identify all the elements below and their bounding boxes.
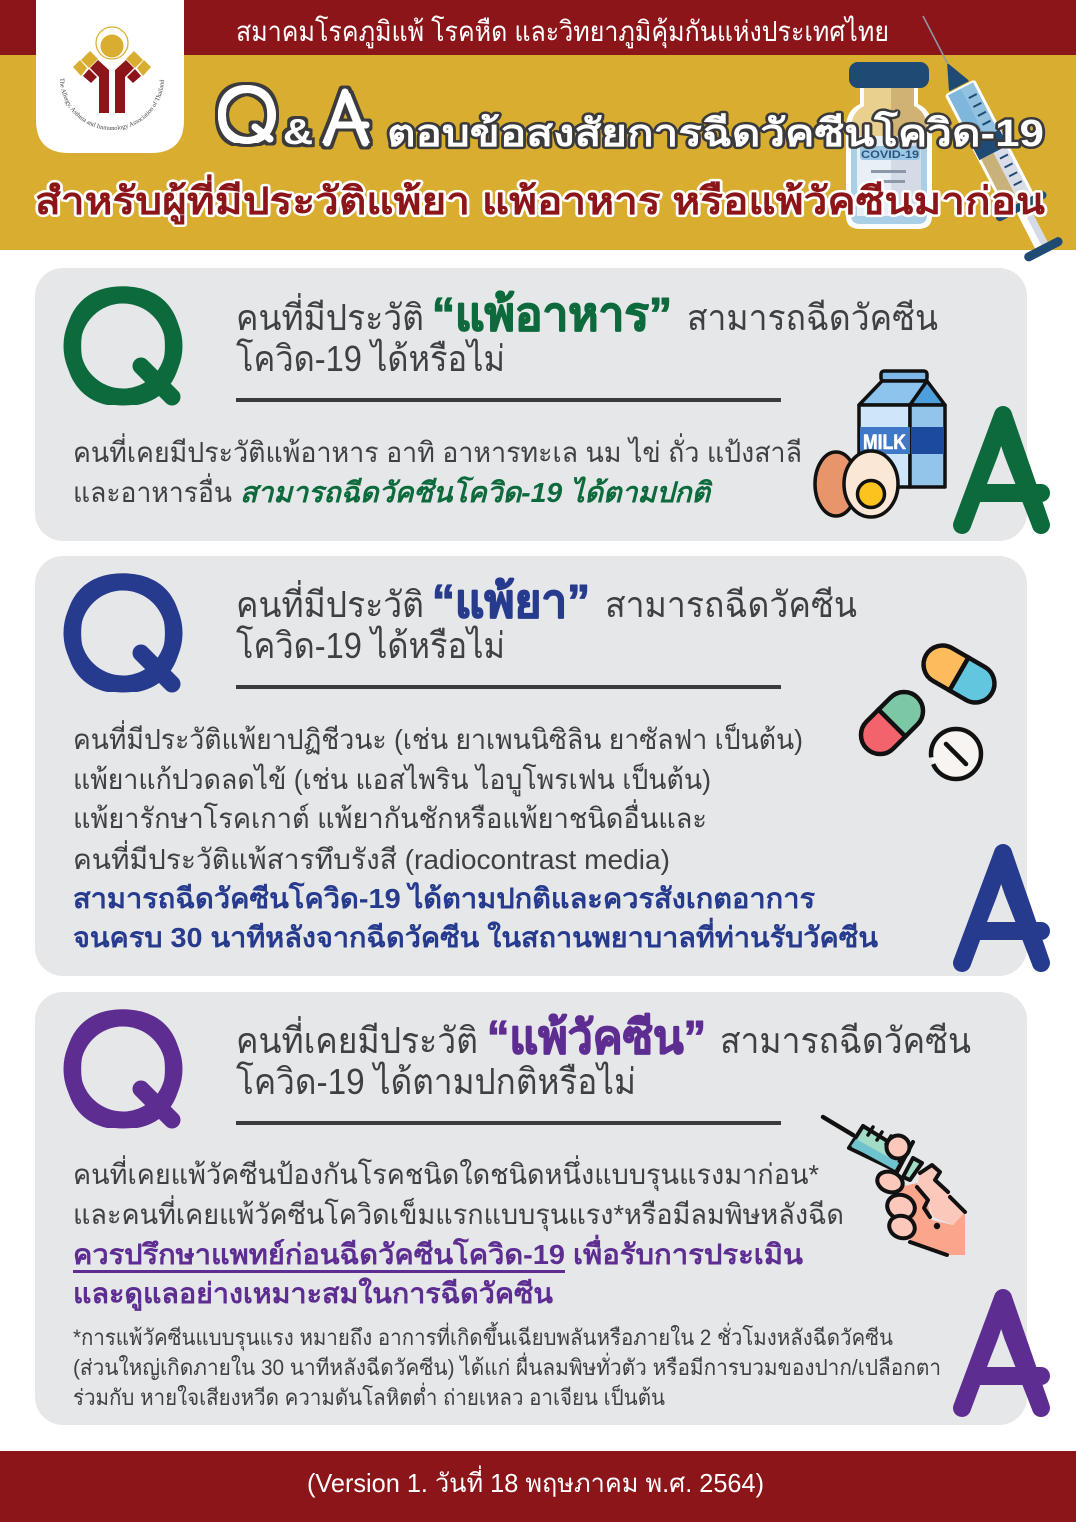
question: คนที่เคยมีประวัติ xyxy=(236,1016,478,1061)
answer: และคนที่เคยแพ้วัคซีนโควิดเข็มแรกแบบรุนแรง*หรือมีลมพิษหลังฉีด xyxy=(73,1195,844,1232)
panel: food allergy xyxy=(35,252,1045,553)
vial illustration: COVID-19 xyxy=(861,149,919,161)
question xyxy=(236,575,857,666)
answer: จนครบ 30 นาทีหลังจากฉีดวัคซีน ในสถานพยาบาลที่ท่านรับวัคซีน xyxy=(73,917,878,953)
title Thai: ตอบข้อสงสัยการฉีดวัคซีนโควิด-19 xyxy=(387,110,1044,155)
answer: ควรปรึกษาแพทย์ก่อนฉีดวัคซีนโควิด-19 xyxy=(73,1237,565,1270)
answer xyxy=(73,720,878,953)
answer: แพ้ยาแก้ปวดลดไข้ (เช่น แอสไพริน ไอบูโพรเฟน เป็นต้น) xyxy=(73,762,711,797)
footnote: ร่วมกับ หายใจเสียงหวีด ความดันโลหิตต่ำ ถ่ายเหลว อาเจียน เป็นต้น xyxy=(73,1382,665,1410)
letter Q green: Q xyxy=(57,252,189,442)
question: “แพ้วัคซีน” xyxy=(487,1011,706,1063)
answer: สามารถฉีดวัคซีนโควิด-19 ได้ตามปกติ xyxy=(240,475,713,508)
logo card: The Allergy, Asthma and Immunology Association of Thailand xyxy=(60,78,164,130)
letter Q green xyxy=(64,286,182,406)
panel: drug allergy xyxy=(35,539,1045,991)
answer: คนที่เคยมีประวัติแพ้อาหาร อาทิ อาหารทะเล นม ไข่ ถั่ว แป้งสาลี xyxy=(73,433,802,468)
answer: คนที่มีประวัติแพ้ยาปฏิชีวนะ (เช่น ยาเพนนิซิลิน ยาซัลฟา เป็นต้น) xyxy=(73,720,803,755)
title Q&A: Q xyxy=(214,68,279,162)
question: สามารถฉีดวัคซีน xyxy=(687,297,938,338)
letter A purple: A xyxy=(958,1293,1045,1436)
icon: pills xyxy=(853,639,1001,779)
association name: สมาคมโรคภูมิแพ้ โรคหืด และวิทยาภูมิคุ้มกันแห่งประเทศไทย xyxy=(236,15,889,49)
icon: hand holding syringe xyxy=(823,1117,965,1255)
question xyxy=(236,1011,971,1102)
letter Q blue xyxy=(64,573,182,692)
question: “แพ้อาหาร” xyxy=(432,288,672,340)
title Q&A: & xyxy=(283,111,313,152)
question: “แพ้ยา” xyxy=(432,575,590,627)
footnote: (ส่วนใหญ่เกิดภายใน 30 นาทีหลังฉีดวัคซีน) ได้แก่ ผื่นลมพิษทั่วตัว หรือมีการบวมของปาก/เปลือกตา xyxy=(73,1352,941,1380)
answer: เพื่อรับการประเมิน xyxy=(573,1234,803,1270)
icon: milk carton and eggs xyxy=(815,371,945,517)
letter Q purple: Q xyxy=(57,975,189,1165)
answer: แพ้ยารักษาโรคเกาต์ แพ้ยากันชักหรือแพ้ยาชนิดอื่นและ xyxy=(73,799,707,834)
icon: milk carton and eggs: MILK xyxy=(863,431,906,454)
footer: (Version 1. วันที่ 18 พฤษภาคม พ.ศ. 2564) xyxy=(307,1465,764,1498)
question: สามารถฉีดวัคซีน xyxy=(605,584,857,625)
letter A blue: A xyxy=(958,848,1045,991)
question: สามารถฉีดวัคซีน xyxy=(720,1020,971,1061)
question: โควิด-19 ได้หรือไม่ xyxy=(236,338,505,379)
answer: และดูแลอย่างเหมาะสมในการฉีดวัคซีน xyxy=(73,1277,553,1311)
vial illustration xyxy=(846,62,932,229)
panel: vaccine allergy xyxy=(35,975,1045,1436)
answer: และอาหารอื่น xyxy=(73,473,232,508)
answer xyxy=(73,1155,844,1311)
title Q&A: A xyxy=(322,79,370,159)
footnote xyxy=(73,1322,941,1410)
question: คนที่มีประวัติ xyxy=(236,293,424,338)
answer xyxy=(73,433,802,508)
question: คนที่มีประวัติ xyxy=(236,580,424,625)
question: โควิด-19 ได้ตามปกติหรือไม่ xyxy=(236,1061,636,1102)
footer xyxy=(0,1451,1076,1522)
header xyxy=(0,0,1076,262)
letter A green: A xyxy=(958,410,1045,553)
syringe illustration xyxy=(898,3,1070,266)
question: โควิด-19 ได้หรือไม่ xyxy=(236,625,505,666)
title Q&A xyxy=(214,82,373,150)
answer: คนที่มีประวัติแพ้สารทึบรังสี (radiocontrast media) xyxy=(73,840,670,875)
subtitle: สำหรับผู้ที่มีประวัติแพ้ยา แพ้อาหาร หรือแพ้วัคซีนมาก่อน xyxy=(35,174,1045,225)
question xyxy=(236,288,938,379)
letter Q blue: Q xyxy=(57,539,189,729)
footnote: *การแพ้วัคซีนแบบรุนแรง หมายถึง อาการที่เกิดขึ้นเฉียบพลันหรือภายใน 2 ชั่วโมงหลังฉีดวัคซีน xyxy=(73,1322,893,1351)
letter Q purple xyxy=(64,1009,182,1128)
answer: สามารถฉีดวัคซีนโควิด-19 ได้ตามปกติและควรสังเกตอาการ xyxy=(73,881,815,914)
answer: คนที่เคยแพ้วัคซีนป้องกันโรคชนิดใดชนิดหนึ่งแบบรุนแรงมาก่อน* xyxy=(73,1155,819,1192)
logo card xyxy=(36,0,184,153)
